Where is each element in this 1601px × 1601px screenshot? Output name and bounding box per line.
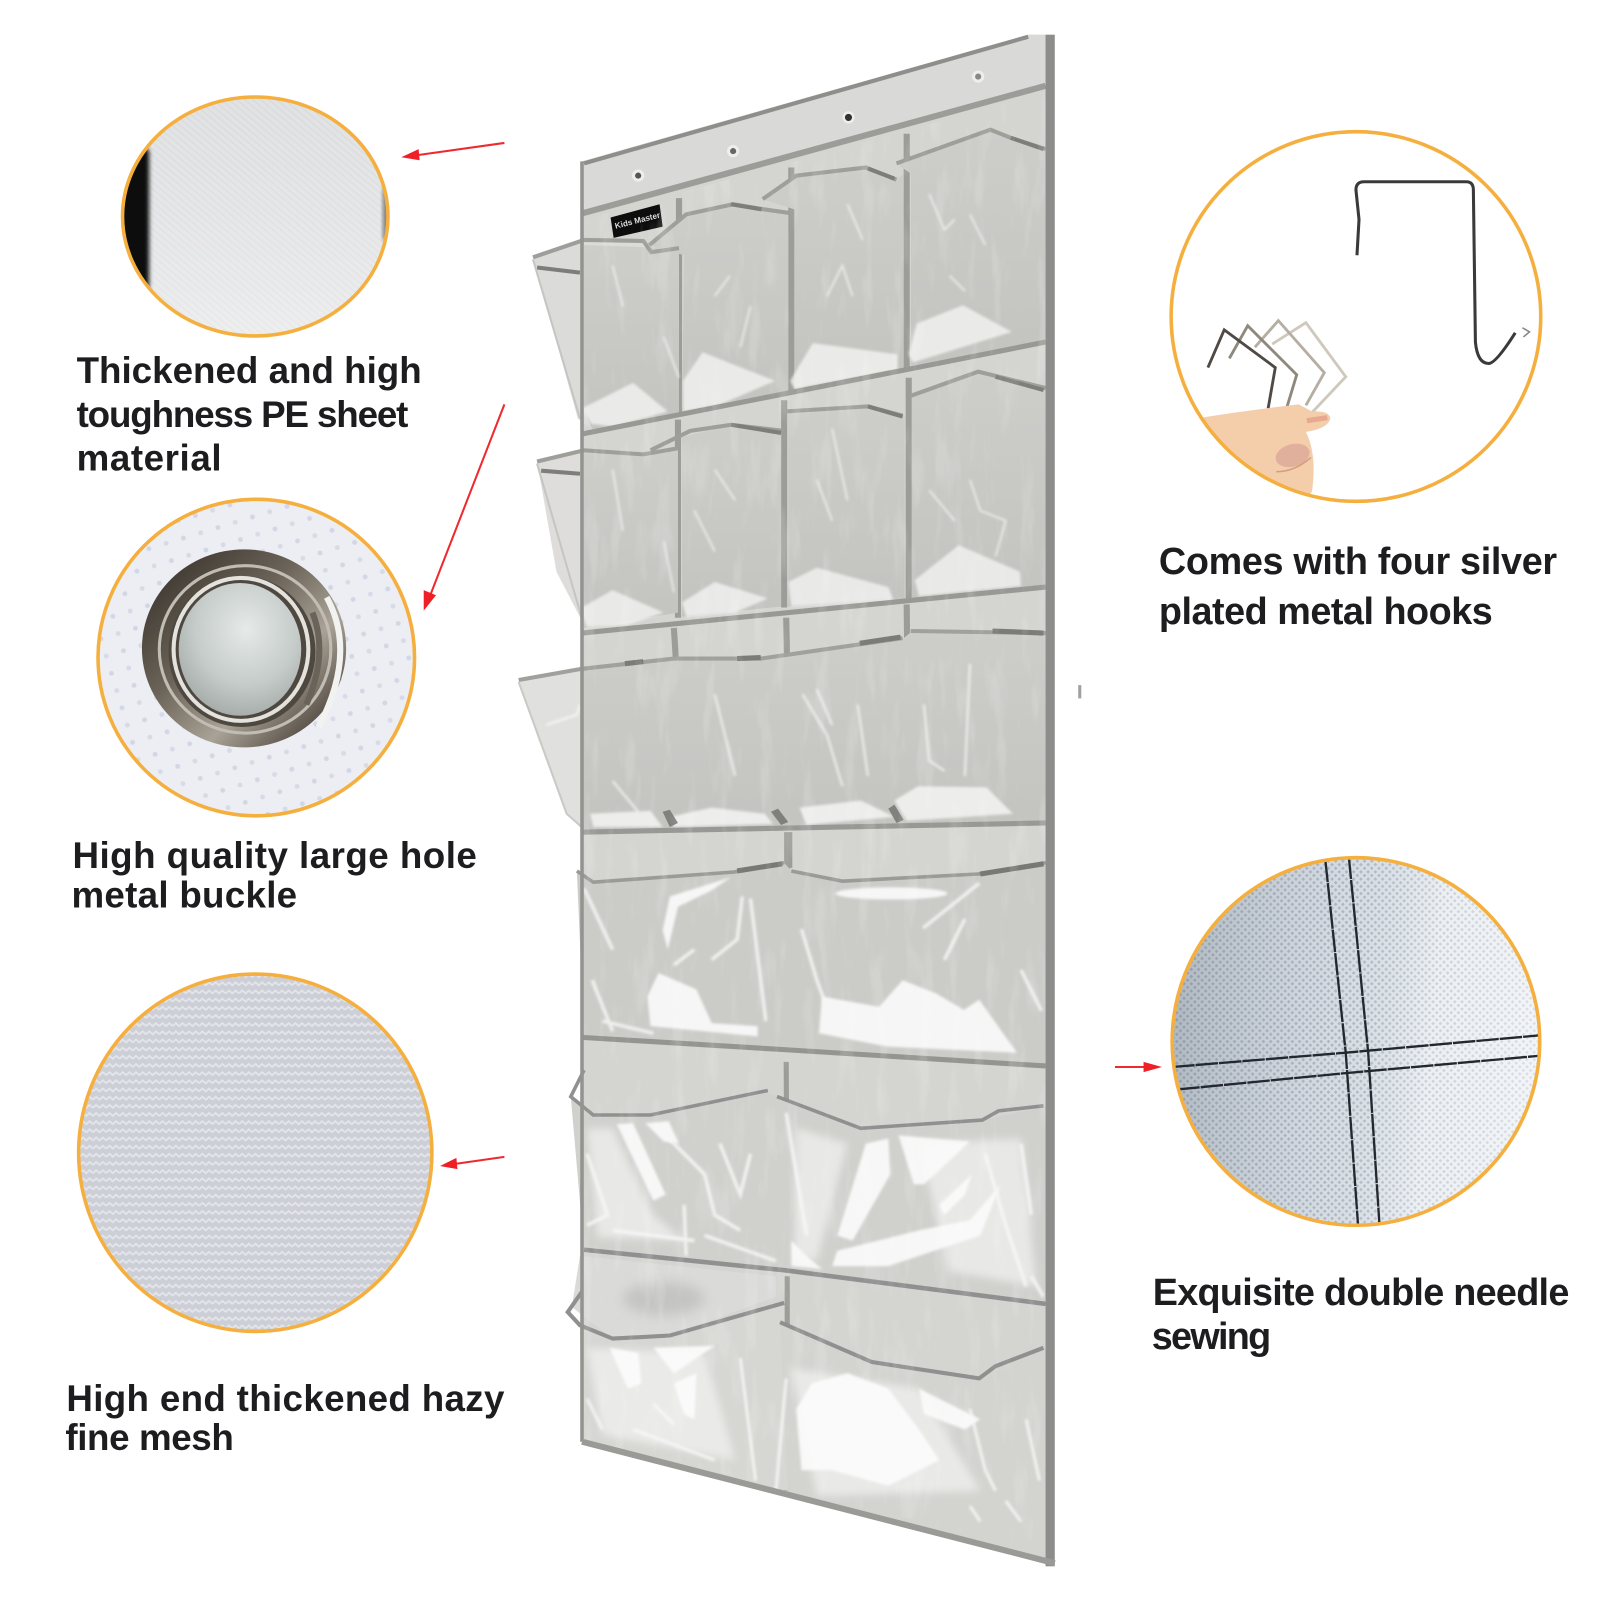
arrow to PE sheet circle [401,143,504,160]
vertical dividers [674,134,909,1491]
row 5 pockets [571,1070,1046,1303]
hand holding hooks [1203,404,1330,494]
row 1 pockets [533,130,1046,430]
plastic streak texture [584,146,1046,1370]
speck near organizer [1078,685,1081,698]
caption: metal buckle [71,835,477,916]
stitching lines [1172,857,1540,1224]
row 3 seam [582,823,1046,832]
caption: PE sheet: toughness PE sheet [77,394,408,435]
row 5 seam [584,1250,1046,1304]
four small silver hooks [1208,321,1346,413]
row 6 highlights [610,1346,980,1486]
row 2 plastic crumples [580,545,1021,627]
row 2 seam [582,587,1046,633]
brand label: Kids Master [614,211,662,231]
detail circle: fine mesh [79,974,432,1331]
caption: PE sheet: Thickened and high [77,350,422,391]
right edge strip [1046,35,1055,1566]
row 1 seam [582,342,1046,434]
detail circle: metal hooks [1171,132,1541,502]
caption: PE sheet: material [77,438,222,479]
caption: PE sheet [77,350,422,479]
arrow to mesh circle [440,1157,504,1169]
detail circle: metal buckle [98,499,415,816]
caption: metal hooks: Comes with four silver [1159,541,1557,583]
caption: double needle sewing [1152,1272,1569,1358]
row 6 soft plastic glare [587,1348,980,1496]
organizer base panel [582,35,1055,1566]
organizer product photo [519,35,1055,1566]
left edge strip [580,161,584,1442]
row 3 pockets [519,630,1046,832]
row 2 pockets [537,372,1046,628]
row 6 pockets [568,1256,1052,1560]
arrow to buckle circle [424,404,504,611]
caption: double needle sewing: sewing [1152,1316,1271,1358]
caption: metal buckle: High quality large hole [72,835,477,876]
detail circle: double needle sewing [1164,847,1552,1235]
brand label [611,204,663,238]
small chevron [1522,328,1530,337]
row 4 highlights [647,877,1017,1053]
caption: metal buckle: metal buckle [71,875,297,916]
detail circle: PE sheet [120,95,390,338]
bottom edge [582,1442,1055,1563]
caption: fine mesh: High end thickened hazy [66,1378,505,1419]
caption: fine mesh [65,1378,505,1458]
metal eyelet [142,549,346,747]
row 4 pockets [577,863,1046,1064]
row 1 plastic crumples [582,305,1012,427]
caption: metal hooks [1159,541,1557,633]
row 4 seam [582,1037,1046,1066]
caption: metal hooks: plated metal hooks [1159,591,1493,633]
caption: double needle sewing: Exquisite double needle [1153,1272,1569,1314]
header band with grommets [582,35,1046,213]
row 3 plastic crumples [590,786,1013,827]
row 5 soft plastic glare [587,1128,1036,1287]
row 5 highlights [617,1121,1001,1269]
arrow to sewing circle [1115,1062,1162,1072]
large black hook [1356,182,1515,363]
caption: fine mesh: fine mesh [65,1417,234,1458]
